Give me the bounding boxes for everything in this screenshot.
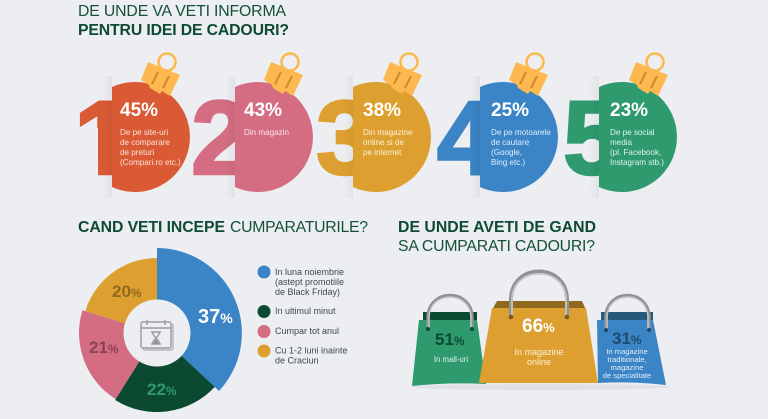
legend: de Craciun xyxy=(275,356,319,366)
panel: ornament 1: 45% xyxy=(120,100,158,121)
bag: magazine traditionale: traditionale, xyxy=(607,355,647,364)
panel: ornament 5: Instagram stb.) xyxy=(610,158,664,167)
panel: ornament 1: (Compari.ro etc.) xyxy=(120,158,181,167)
panel: ornament 3: Din magazine xyxy=(363,128,413,137)
icon: calendar with hourglass xyxy=(141,320,173,350)
pie label 21%: 21% xyxy=(89,338,119,357)
bag: magazine online: 66% xyxy=(522,316,555,337)
panel: ornament 2 xyxy=(191,54,313,198)
panel: ornament 3: online si de xyxy=(363,138,404,147)
panel: ornament 1: De pe site-uri xyxy=(120,128,168,137)
panel: ornament 3: pe internet xyxy=(363,148,402,157)
pie label 20%: 20% xyxy=(112,282,142,301)
pie label 37%: 37% xyxy=(198,306,233,328)
panel: ornament 4: De pe motoarele xyxy=(491,128,551,137)
bag: magazine online: online xyxy=(527,357,551,367)
bag: magazine traditionale: de specialitate xyxy=(603,371,651,380)
legend: In luna noiembrie xyxy=(275,267,344,277)
panel: ornament 2: 43% xyxy=(244,100,282,121)
panel: ornament 1: de comparare xyxy=(120,138,170,147)
panel: ornament 5: (pl. Facebook, xyxy=(610,148,661,157)
panel: ornament 5: media xyxy=(610,138,633,147)
bag: mall-uri: In mall-uri xyxy=(434,355,468,364)
bag: mall-uri xyxy=(412,296,486,386)
panel: ornament 2: Din magazin xyxy=(244,128,289,137)
panel: ornament 4: 25% xyxy=(491,100,529,121)
heading: where to buy: DE UNDE AVETI DE GAND xyxy=(398,219,596,236)
heading: when shopping starts xyxy=(78,219,368,236)
heading: where to buy xyxy=(398,219,596,255)
bag: magazine traditionale: magazine xyxy=(611,363,643,372)
donut chart xyxy=(79,248,242,412)
bag: mall-uri: 51% xyxy=(435,330,465,349)
panel: ornament 4: 4 xyxy=(437,80,495,197)
shadow under bags xyxy=(410,384,670,390)
panel: ornament 3: 38% xyxy=(363,100,401,121)
bag: magazine traditionale: In magazine xyxy=(606,347,648,356)
legend: (astept promotiile xyxy=(275,277,344,287)
legend: Cu 1-2 luni inainte xyxy=(275,346,348,356)
panel: ornament 1: 1 xyxy=(74,80,132,197)
legend: de Black Friday) xyxy=(275,287,340,297)
panel: ornament 5: 5 xyxy=(563,80,621,197)
panel: ornament 3: 3 xyxy=(316,80,374,197)
title: top heading: DE UNDE VA VETI INFORMA xyxy=(78,3,286,20)
bag: magazine traditionale: 31% xyxy=(612,329,642,348)
bag: magazine online xyxy=(479,272,598,383)
heading: when shopping starts: CUMPARATURILE? xyxy=(230,219,368,236)
panel: ornament 1 xyxy=(74,54,190,198)
panel: ornament 5 xyxy=(563,54,677,198)
panel: ornament 3 xyxy=(316,54,431,198)
heading: where to buy: SA CUMPARATI CADOURI? xyxy=(398,238,595,255)
panel: ornament 4 xyxy=(437,54,558,198)
panel: ornament 4: (Google, xyxy=(491,148,522,157)
panel: ornament 4: Bing etc.) xyxy=(491,158,525,167)
heading: when shopping starts: CAND VETI INCEPE xyxy=(78,219,225,236)
panel: ornament 4: de cautare xyxy=(491,138,530,147)
panel: ornament 1: de preturi xyxy=(120,148,154,157)
legend: Cumpar tot anul xyxy=(275,326,339,336)
title: top heading xyxy=(78,3,289,39)
bag: magazine traditionale xyxy=(597,296,666,385)
pie label 22%: 22% xyxy=(147,380,177,399)
panel: ornament 5: De pe social xyxy=(610,128,655,137)
panel: ornament 5: 23% xyxy=(610,100,648,121)
bag: magazine online: In magazine xyxy=(514,347,564,357)
title: top heading: PENTRU IDEI DE CADOURI? xyxy=(78,22,289,39)
legend xyxy=(258,266,348,366)
legend: In ultimul minut xyxy=(275,306,336,316)
panel: ornament 2: 2 xyxy=(191,80,249,197)
